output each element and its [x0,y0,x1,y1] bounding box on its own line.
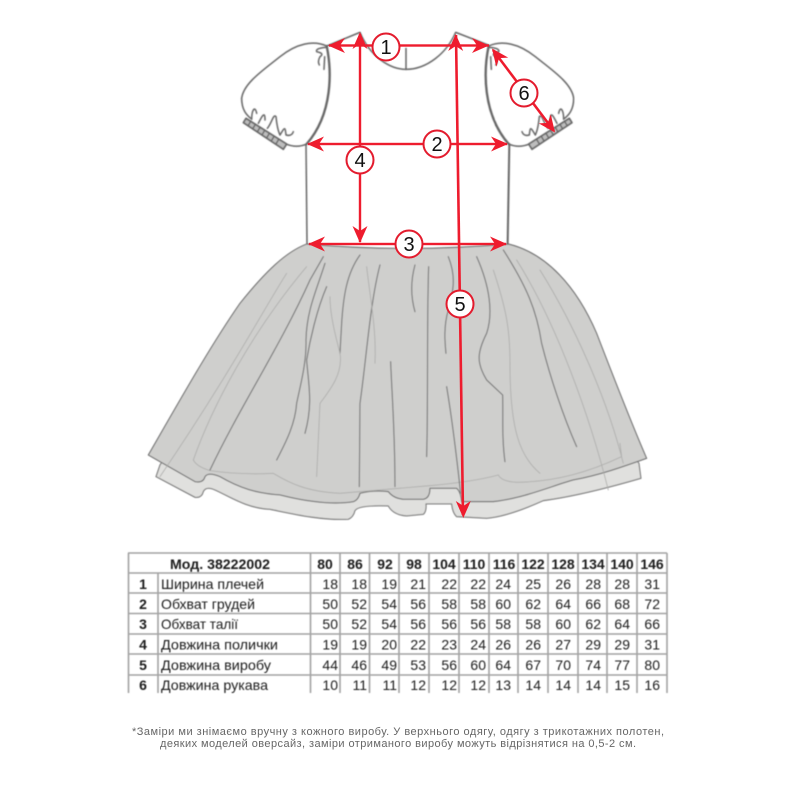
row 5: garment length: 77 [614,657,630,673]
row 2: chest: 54 [381,596,397,612]
row 3: waist: 58 [525,616,541,632]
marker 6 [510,80,538,106]
row 1: shoulder width: 19 [381,576,397,592]
row 2: chest: 2 [139,596,147,612]
row 1: shoulder width: 28 [585,576,601,592]
marker 3 [396,230,422,258]
row 4: front length: 4 [139,636,147,652]
row 4: front length: 26 [525,636,541,652]
row 5: garment length: 56 [441,657,457,673]
table header [170,556,664,572]
row 2: chest: 60 [495,596,511,612]
marker 4: 4 [354,150,366,172]
row 1: shoulder width: 22 [470,576,486,592]
row 6: sleeve length: 11 [382,677,397,693]
row 1: shoulder width: 28 [614,576,630,592]
row 1: shoulder width: 18 [351,576,367,592]
row 2: chest: 56 [410,596,426,612]
row 1: shoulder width: 21 [410,576,426,592]
table header: 92 [377,556,393,572]
footnote: *Заміри ми знімаємо вручну з кожного виробу. У верхнього одягу, одягу з трикотажних полотен, [132,726,664,738]
table header: 146 [640,556,664,572]
row 6: sleeve length: 12 [441,677,457,693]
row 3: waist: 58 [495,616,511,632]
row 2: chest: 66 [585,596,601,612]
dress illustration [148,32,647,519]
row 5: garment length: 70 [555,657,571,673]
numbered markers [346,34,538,318]
row 6: sleeve length: Довжина рукава [161,677,268,693]
row 4: front length: 27 [555,636,571,652]
marker 6: 6 [518,83,530,105]
skirt folds [210,257,323,470]
row 2: chest: Обхват грудей [161,596,255,612]
row 3: waist: 66 [644,616,660,632]
row 4: front length: 24 [470,636,486,652]
row 3: waist: 3 [139,616,147,632]
row 5: garment length: Довжина виробу [161,657,271,673]
marker 1: 1 [380,37,392,59]
arrow 3: waist [308,236,507,252]
arrow 5: garment length [448,34,471,518]
marker 3: 3 [403,234,415,256]
footnote [132,726,664,750]
row 2: chest: 64 [555,596,571,612]
row 4: front length: 29 [614,636,630,652]
row 5: garment length: 67 [525,657,541,673]
row 6: sleeve length: 13 [495,677,511,693]
row 3: waist: 56 [441,616,457,632]
row 6: sleeve length [139,677,660,693]
marker 1 [372,34,400,60]
row 5: garment length: 5 [139,657,147,673]
row 1: shoulder width: 24 [495,576,511,592]
row 4: front length: 22 [410,636,426,652]
row 4: front length: Довжина полички [161,636,278,652]
right sleeve [486,43,574,149]
row 1: shoulder width: 22 [441,576,457,592]
row 3: waist: 56 [470,616,486,632]
row 2: chest: 72 [644,596,660,612]
skirt inner hem [193,443,622,493]
row 1: shoulder width: Ширина плечей [161,576,264,592]
table header: 104 [432,556,456,572]
marker 4 [346,146,374,174]
row 6: sleeve length: 6 [139,677,147,693]
row 6: sleeve length: 10 [322,677,338,693]
row 5: garment length: 74 [585,657,601,673]
row 5: garment length: 60 [470,657,486,673]
row 2: chest: 52 [351,596,367,612]
row 6: sleeve length: 15 [614,677,630,693]
left sleeve [242,43,330,149]
marker 5: 5 [454,294,466,316]
table header: 110 [463,556,486,572]
table header: 134 [581,556,605,572]
row 3: waist: 54 [381,616,397,632]
tulle skirt [148,244,647,519]
row 3: waist: Обхват талії [161,616,238,632]
row 4: front length: 31 [644,636,660,652]
row 5: garment length: 49 [381,657,397,673]
row 6: sleeve length: 14 [525,677,541,693]
row 4: front length: 26 [495,636,511,652]
arrow 2: chest [307,136,508,152]
table header: 116 [493,556,516,572]
row 6: sleeve length: 12 [410,677,426,693]
row 4: front length: 20 [381,636,397,652]
row 5: garment length: 44 [322,657,338,673]
row 5: garment length: 53 [410,657,426,673]
row 6: sleeve length: 14 [585,677,601,693]
row 4: front length: 29 [585,636,601,652]
row 1: shoulder width: 1 [139,576,147,592]
row 2: chest: 62 [525,596,541,612]
row 5: garment length: 64 [495,657,511,673]
neckline and shoulders [327,32,488,69]
row 1: shoulder width: 26 [555,576,571,592]
row 6: sleeve length: 12 [470,677,486,693]
row 3: waist: 50 [322,616,338,632]
row 5: garment length: 80 [644,657,660,673]
row 4: front length: 19 [322,636,338,652]
table header: Мод. 38222002 [170,556,270,572]
table header: 86 [347,556,363,572]
row 3: waist: 64 [614,616,630,632]
row 6: sleeve length: 16 [644,677,660,693]
row 3: waist: 60 [555,616,571,632]
row 3: waist: 62 [585,616,601,632]
bodice [242,32,574,243]
table header: 128 [551,556,575,572]
footnote: деяких моделей оверсайз, заміри отриманого виробу можуть відрізнятися на 0,5-2 см. [160,738,636,750]
row 2: chest [139,596,660,612]
marker 2: 2 [431,134,443,156]
size table [128,553,667,693]
row 4: front length [139,636,660,652]
marker 2 [424,130,450,158]
row 2: chest: 68 [614,596,630,612]
measurement arrows [307,32,561,518]
row 1: shoulder width: 31 [644,576,660,592]
row 5: garment length: 46 [351,657,367,673]
row 5: garment length [139,657,660,673]
table header: 140 [610,556,634,572]
row 2: chest: 58 [470,596,486,612]
row 1: shoulder width: 25 [525,576,541,592]
skirt back layer [156,397,641,519]
row 3: waist: 56 [410,616,426,632]
row 6: sleeve length: 11 [352,677,367,693]
table header: 122 [521,556,545,572]
row 6: sleeve length: 14 [555,677,571,693]
bodice side seams [304,144,309,243]
skirt front layer [148,244,647,503]
arrow 6: sleeve length [486,44,561,137]
row 2: chest: 50 [322,596,338,612]
row 4: front length: 19 [351,636,367,652]
row 2: chest: 58 [441,596,457,612]
table header: 80 [317,556,333,572]
arrow 1: shoulder width [328,38,489,53]
row 3: waist: 52 [351,616,367,632]
arrow 4: front length [352,32,368,243]
row 1: shoulder width [139,576,660,592]
marker 5 [446,290,474,318]
row 3: waist [139,616,660,632]
table header: 98 [406,556,422,572]
row 4: front length: 23 [441,636,457,652]
row 1: shoulder width: 18 [322,576,338,592]
